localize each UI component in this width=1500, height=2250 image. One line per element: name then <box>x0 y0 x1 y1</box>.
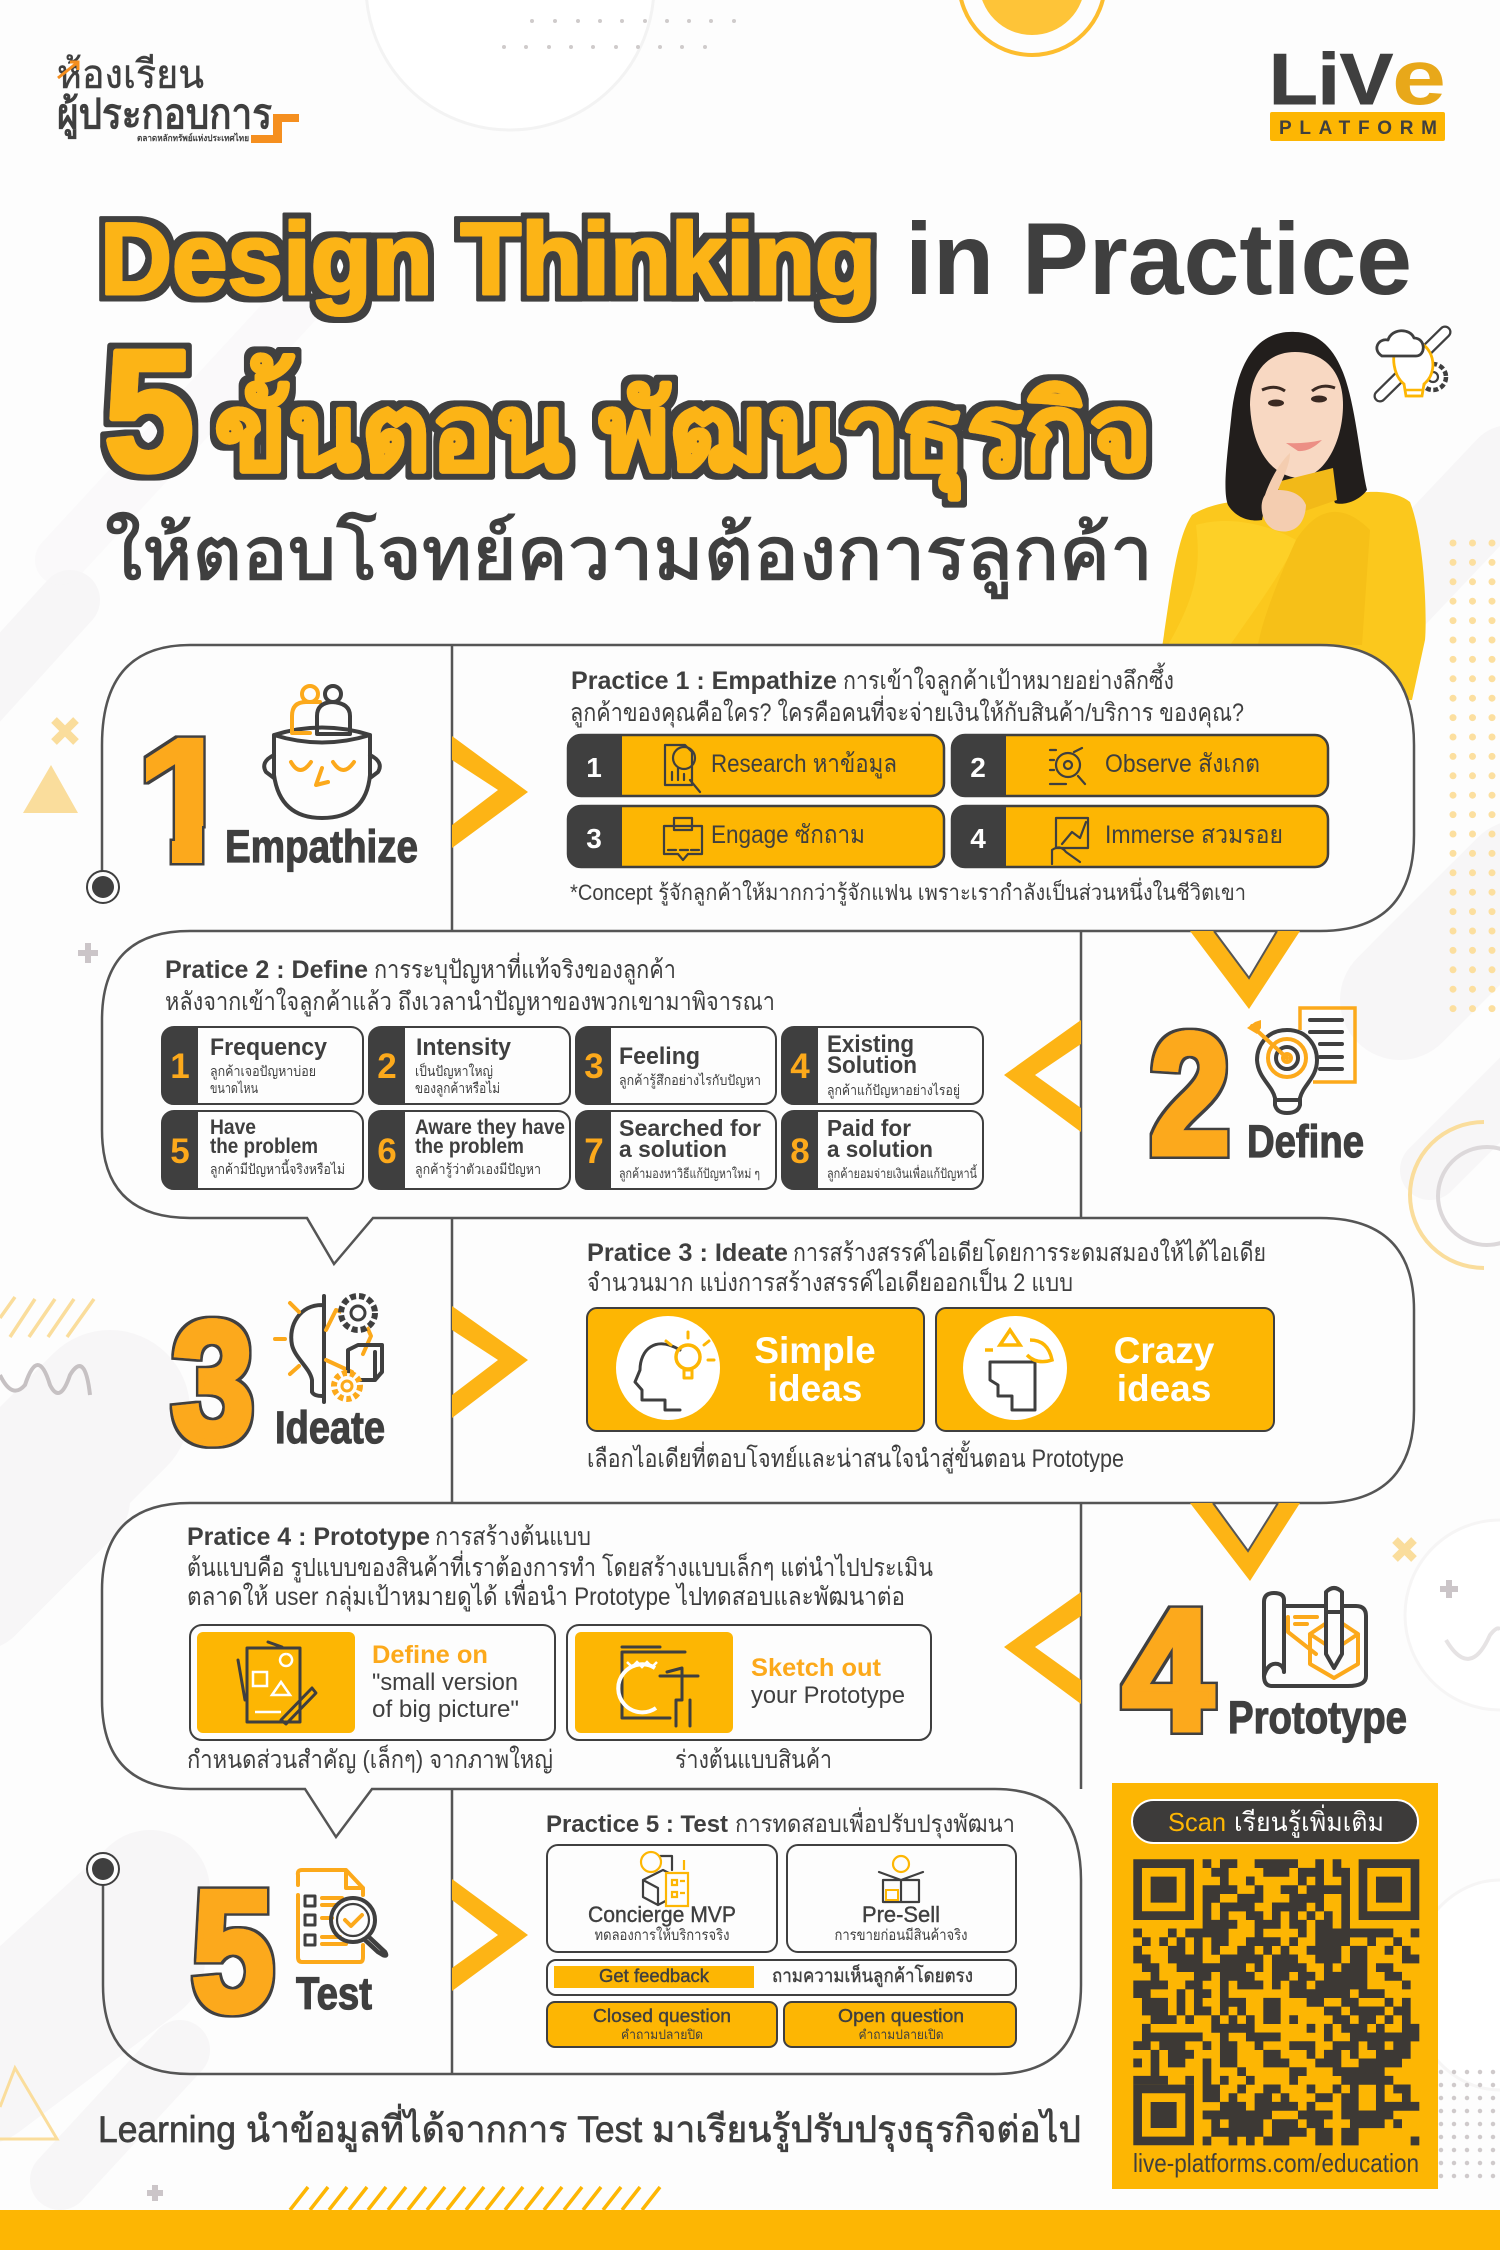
title line 1 <box>100 202 1412 316</box>
practice 1 buttons: 3 <box>586 823 602 854</box>
practice 1 heading: ลูกค้าของคุณคือใคร? ใครคือคนที่จะจ่ายเงินให้กับสินค้า/บริการ ของคุณ? <box>570 695 1244 728</box>
define grid: 5 <box>170 1132 190 1171</box>
card: concierge MVP <box>547 1845 777 1952</box>
label Define: Define <box>1247 1116 1364 1167</box>
logo: Live Platform: e <box>1392 33 1446 121</box>
define grid: ขนาดไหน <box>210 1080 258 1096</box>
define grid: Solution <box>827 1052 917 1079</box>
practice 3 heading <box>587 1238 1266 1297</box>
card: crazy ideas <box>936 1308 1274 1431</box>
practice 1 buttons: Research หาข้อมูล <box>711 750 897 779</box>
practice 5 heading <box>546 1807 1015 1839</box>
practice 4 captions <box>187 1744 832 1774</box>
number 2: 2 <box>1150 999 1230 1190</box>
card: sketch out: your Prototype <box>751 1682 905 1709</box>
decorations <box>0 543 1500 2210</box>
button: open question: คำถามปลายเปิด <box>858 2027 944 2042</box>
define grid: Aware they have <box>415 1116 565 1139</box>
define grid: 4 <box>790 1047 810 1086</box>
bar: get feedback <box>547 1960 1016 1995</box>
define grid: 1 <box>170 1047 190 1086</box>
practice 5 heading: Practice 5 : Test <box>546 1811 728 1838</box>
practice 4 heading: การสร้างต้นแบบ <box>435 1523 591 1551</box>
card: define on: of big picture" <box>372 1696 519 1723</box>
practice 1 heading <box>570 662 1244 728</box>
define grid: เป็นปัญหาใหญ่ <box>415 1062 493 1079</box>
button: closed question: คำถามปลายปิด <box>621 2027 703 2042</box>
card: simple ideas: ideas <box>768 1368 862 1409</box>
bar: get feedback: ถามความเห็นลูกค้าโดยตรง <box>772 1963 973 1987</box>
number 5: 5 <box>192 1856 274 2047</box>
define grid: ของลูกค้าหรือไม่ <box>415 1080 500 1097</box>
define grid: ลูกค้ายอมจ่ายเงินเพื่อแก้ปัญหานี้ <box>827 1164 977 1182</box>
card: pre-sell: Pre-Sell <box>862 1902 940 1927</box>
define grid: 3 <box>584 1047 604 1086</box>
icon: blueprint and pencil <box>1264 1588 1366 1686</box>
title line 3: ให้ตอบโจทย์ความต้องการลูกค้า <box>105 512 1153 599</box>
arrows <box>452 736 1300 1991</box>
card: define on <box>190 1625 555 1740</box>
icon: head with people <box>264 686 380 818</box>
practice 3 heading: Pratice 3 : Ideate <box>587 1239 788 1267</box>
panel: connected outline <box>102 645 1414 2074</box>
label Empathize: Empathize <box>225 821 418 872</box>
practice 4 heading: Pratice 4 : Prototype <box>187 1523 430 1551</box>
card: concierge MVP: Concierge MVP <box>588 1902 736 1927</box>
label Ideate: Ideate <box>275 1402 385 1453</box>
practice 1 heading: การเข้าใจลูกค้าเป้าหมายอย่างลึกซึ้ง <box>843 662 1174 696</box>
define grid: ลูกค้ามองหาวิธีแก้ปัญหาใหม่ ๆ <box>619 1166 760 1182</box>
card: sketch out: Sketch out <box>751 1654 882 1682</box>
practice 4 heading: ต้นแบบคือ รูปแบบของสินค้าที่เราต้องการทำ โดยสร้างแบบเล็กๆ แต่นำไปประเมิน <box>187 1550 933 1583</box>
title line 2: 5 <box>104 315 194 507</box>
learning statement: Learning นำข้อมูลที่ได้จากการ Test มาเรียนรู้ปรับปรุงธุรกิจต่อไป <box>98 2103 1081 2152</box>
logo: classroom for entrepreneurs <box>57 53 299 143</box>
number 4: 4 <box>1123 1575 1213 1766</box>
practice 4 captions: กำหนดส่วนสำคัญ (เล็กๆ) จากภาพใหญ่ <box>187 1744 553 1774</box>
practice 1 buttons: Observe สังเกต <box>1105 750 1260 778</box>
QR panel: live-platforms.com/education <box>1133 2148 1419 2178</box>
button: open question: Open question <box>838 2006 964 2026</box>
card: simple ideas <box>587 1308 924 1431</box>
define grid: Frequency <box>210 1034 328 1061</box>
define grid: Paid for <box>827 1115 911 1141</box>
node dots <box>87 871 119 1885</box>
define grid: the problem <box>415 1135 524 1158</box>
practice 4 captions: ร่างต้นแบบสินค้า <box>675 1746 832 1774</box>
icon: idea bulb with pencil and gear <box>1377 331 1446 396</box>
define grid: 6 <box>377 1132 397 1171</box>
define grid: ลูกค้าเจอปัญหาบ่อย <box>210 1063 316 1080</box>
QR panel: Scan <box>1168 1807 1226 1837</box>
card: concierge MVP: ทดลองการให้บริการจริง <box>594 1926 730 1944</box>
number 1: 1 <box>136 703 234 899</box>
practice 1 buttons: 4 <box>970 823 986 854</box>
logo: Live Platform <box>1269 33 1446 141</box>
title line 2 <box>104 315 1152 507</box>
bottom bar <box>0 2210 1500 2250</box>
icon: target bulb and list <box>1247 1008 1355 1113</box>
button: closed question <box>547 2002 777 2047</box>
card: pre-sell <box>787 1845 1016 1952</box>
define grid: 8 <box>790 1132 810 1171</box>
define grid: the problem <box>210 1135 318 1158</box>
define grid: a solution <box>619 1136 727 1162</box>
define grid: Have <box>210 1116 256 1139</box>
number 3: 3 <box>172 1287 254 1478</box>
practice 1 buttons: Engage ซักถาม <box>711 821 865 849</box>
card: pre-sell: การขายก่อนมีสินค้าจริง <box>834 1927 968 1944</box>
define grid: ลูกค้ารู้ว่าตัวเองมีปัญหา <box>415 1161 541 1178</box>
card: crazy ideas: Crazy <box>1114 1330 1215 1371</box>
define grid: Intensity <box>416 1034 512 1061</box>
top decorative sun <box>959 0 1105 55</box>
title line 2: ขั้นตอน พัฒนาธุรกิจ <box>214 353 1152 501</box>
woman photo illustration <box>1160 332 1426 700</box>
title line 1: in Practice <box>905 202 1412 316</box>
practice 1 buttons: 2 <box>970 752 986 783</box>
define grid: ลูกค้ารู้สึกอย่างไรกับปัญหา <box>619 1072 761 1089</box>
bar: get feedback: Get feedback <box>599 1966 710 1986</box>
card: define on: "small version <box>372 1669 518 1696</box>
QR panel: เรียนรู้เพิ่มเติม <box>1234 1804 1384 1838</box>
logo: classroom for entrepreneurs: ผู้ประกอบการ <box>57 91 272 140</box>
card: simple ideas: Simple <box>754 1330 876 1371</box>
practice 3 heading: จำนวนมาก แบ่งการสร้างสรรค์ไอเดียออกเป็น 2 แบบ <box>587 1267 1073 1297</box>
button: open question <box>784 2002 1016 2047</box>
practice 3 note: เลือกไอเดียที่ตอบโจทย์และน่าสนใจนำสู่ขั้นตอน Prototype <box>587 1440 1124 1474</box>
define grid: 2 <box>377 1047 397 1086</box>
logo: Live Platform: LiV <box>1269 40 1393 120</box>
practice 3 heading: การสร้างสรรค์ไอเดียโดยการระดมสมองให้ได้ไอเดีย <box>793 1238 1266 1267</box>
label Test: Test <box>296 1968 372 2019</box>
top decorative circle <box>366 0 736 130</box>
define grid: Searched for <box>619 1115 761 1141</box>
define grid <box>162 1027 983 1189</box>
practice 4 heading <box>187 1523 933 1612</box>
label Prototype: Prototype <box>1228 1692 1407 1743</box>
icon: half bulb, gear, cube <box>275 1296 382 1402</box>
practice 2 heading <box>165 952 775 1017</box>
practice 2 heading: Pratice 2 : Define <box>165 956 368 984</box>
practice 2 heading: หลังจากเข้าใจลูกค้าแล้ว ถึงเวลานำปัญหาของพวกเขามาพิจารณา <box>165 987 775 1017</box>
define grid: ลูกค้าแก้ปัญหาอย่างไรอยู่ <box>827 1082 960 1099</box>
logo: classroom for entrepreneurs: ตลาดหลักทรัพย์แห่งประเทศไทย <box>137 132 249 143</box>
define grid: 7 <box>584 1132 604 1171</box>
practice 4 heading: ตลาดให้ user กลุ่มเป้าหมายดูได้ เพื่อนำ Prototype ไปทดสอบและพัฒนาต่อ <box>187 1579 905 1612</box>
QR panel <box>1112 1783 1438 2189</box>
practice 1 buttons: 1 <box>586 752 602 783</box>
logo: classroom for entrepreneurs: ห้องเรียน <box>57 53 204 97</box>
title line 1: Design Thinking <box>100 202 876 316</box>
icon: checklist with magnifier <box>298 1870 386 1962</box>
card: define on: Define on <box>372 1641 488 1669</box>
practice 1 buttons <box>568 735 1328 867</box>
define grid: Feeling <box>619 1043 700 1070</box>
card: crazy ideas: ideas <box>1117 1368 1211 1409</box>
practice 2 heading: การระบุปัญหาที่แท้จริงของลูกค้า <box>374 952 676 985</box>
button: closed question: Closed question <box>593 2006 731 2026</box>
define grid: Existing <box>827 1031 914 1058</box>
card: sketch out <box>567 1625 931 1740</box>
logo: Live Platform: PLATFORM <box>1279 118 1437 139</box>
practice 5 heading: การทดสอบเพื่อปรับปรุงพัฒนา <box>735 1807 1015 1839</box>
practice 1 concept note: *Concept รู้จักลูกค้าให้มากกว่ารู้จักแฟน เพราะเรากำลังเป็นส่วนหนึ่งในชีวิตเขา <box>570 877 1246 906</box>
practice 1 heading: Practice 1 : Empathize <box>571 667 837 695</box>
define grid: a solution <box>827 1136 933 1162</box>
practice 1 buttons: Immerse สวมรอย <box>1105 821 1283 849</box>
define grid: ลูกค้ามีปัญหานี้จริงหรือไม่ <box>210 1159 345 1178</box>
